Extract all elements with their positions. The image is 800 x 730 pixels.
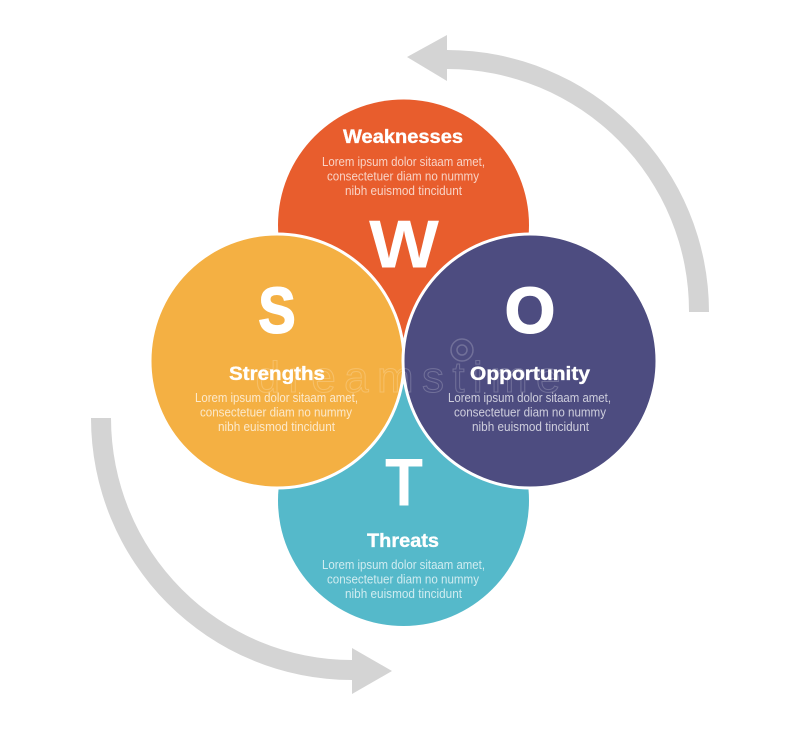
heading: Opportunity: Opportunity: [470, 364, 590, 385]
arrow: top right clockwise cycle: [407, 35, 709, 312]
body: Opportunity: [448, 391, 611, 434]
body: Weaknesses: nibh euismod tincidunt: [345, 184, 462, 198]
letter O: O: [505, 274, 555, 346]
body: Threats: nibh euismod tincidunt: [345, 587, 462, 601]
heading: Weaknesses: Weaknesses: [343, 127, 463, 148]
body: Opportunity: Lorem ipsum dolor sitaam amet,: [448, 391, 611, 405]
arrow: bottom left cycle: [91, 418, 392, 694]
body: Strengths: Lorem ipsum dolor sitaam amet,: [195, 391, 358, 405]
heading: Strengths: Strengths: [229, 364, 325, 385]
letter W: W: [369, 206, 440, 282]
opportunity text: [448, 364, 611, 434]
body: Weaknesses: consectetuer diam no nummy: [327, 170, 480, 184]
strengths text: [195, 364, 358, 434]
heading: Threats: Threats: [367, 531, 439, 552]
body: Weaknesses: [322, 155, 485, 198]
body: Threats: consectetuer diam no nummy: [327, 572, 480, 586]
panel: strengths circle: [150, 234, 404, 488]
threats text: [322, 531, 485, 601]
panel: opportunity circle: [403, 234, 657, 488]
panel: threats circle: [278, 375, 529, 626]
body: Strengths: [195, 391, 358, 434]
body: Strengths: consectetuer diam no nummy: [200, 406, 353, 420]
weaknesses text: [322, 127, 485, 198]
body: Opportunity: consectetuer diam no nummy: [454, 406, 607, 420]
body: Weaknesses: Lorem ipsum dolor sitaam amet,: [322, 155, 485, 169]
body: Opportunity: nibh euismod tincidunt: [472, 420, 589, 434]
letter T: T: [385, 444, 423, 520]
watermark: dreamstime: [256, 353, 560, 402]
letter S: S: [258, 274, 296, 346]
body: Threats: Lorem ipsum dolor sitaam amet,: [322, 558, 485, 572]
panel: weaknesses circle: [278, 100, 529, 350]
body: Strengths: nibh euismod tincidunt: [218, 420, 335, 434]
body: Threats: [322, 558, 485, 601]
